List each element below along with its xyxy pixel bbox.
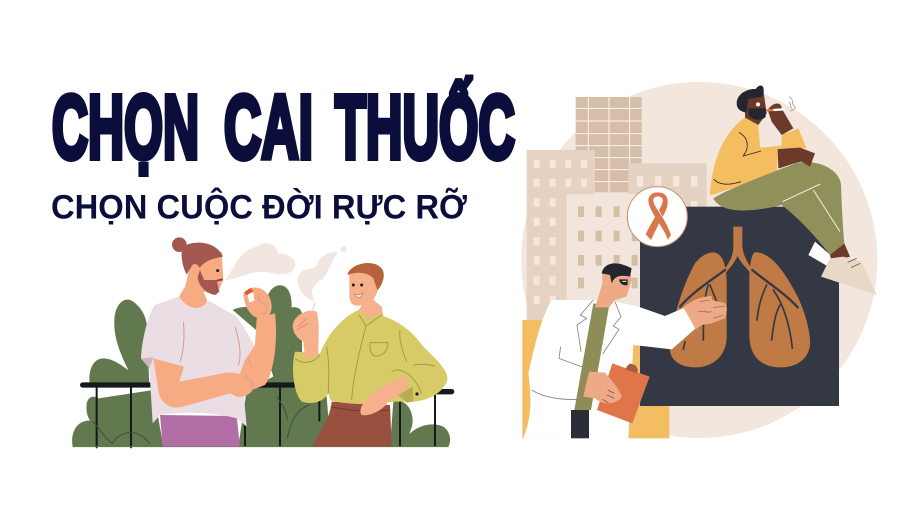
illustration: doctor, lungs and city <box>521 82 877 438</box>
title: THUỐC <box>335 76 515 178</box>
front building <box>567 194 640 328</box>
balcony railing <box>83 385 452 447</box>
ground <box>73 445 448 448</box>
title: CHỌN <box>52 78 199 178</box>
x-ray panel <box>640 207 839 406</box>
subtitle: CHỌN CUỘC ĐỜI RỰC RỠ <box>51 188 467 226</box>
rear building <box>628 163 707 208</box>
illustration: two men smoking on a balcony <box>72 237 452 447</box>
ribbon badge <box>627 187 687 247</box>
smoke clouds <box>225 243 347 302</box>
seated man smoking <box>710 86 877 295</box>
background circle <box>521 82 877 438</box>
lungs <box>670 227 810 367</box>
left building <box>527 150 595 320</box>
title <box>52 76 515 178</box>
bushes <box>72 285 450 447</box>
doctor <box>523 263 727 438</box>
yellow blocks <box>522 320 669 438</box>
man in yellow shirt <box>293 263 447 447</box>
man with bun <box>141 237 276 447</box>
grid building <box>576 97 642 192</box>
title: CAI <box>224 78 313 178</box>
